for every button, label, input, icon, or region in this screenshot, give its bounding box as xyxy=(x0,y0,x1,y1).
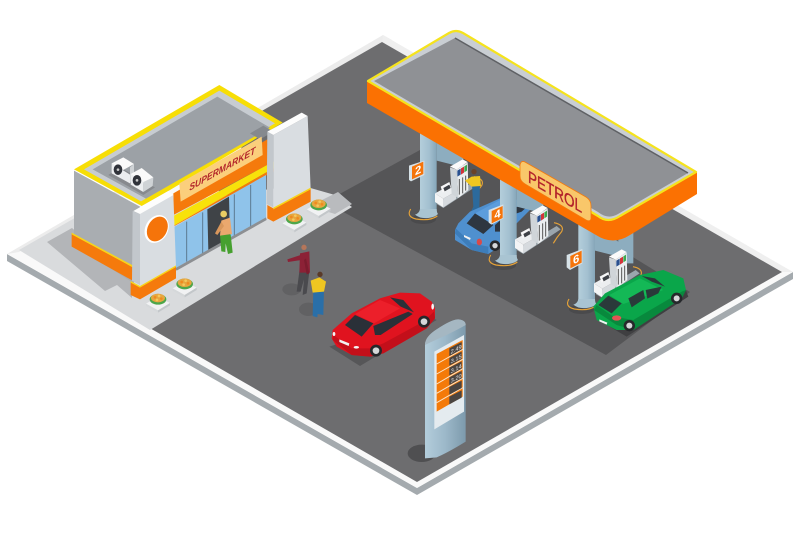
building left wall xyxy=(74,171,140,283)
canopy roof edge xyxy=(368,31,696,220)
price board: 2.49 xyxy=(451,344,462,356)
air conditioning units xyxy=(108,157,155,195)
price board xyxy=(437,340,463,412)
price board: 3.15 xyxy=(451,354,462,366)
price totem xyxy=(408,319,466,462)
supermarket building xyxy=(72,85,331,313)
yellow canopy strip xyxy=(173,162,273,226)
pump number sign 4 xyxy=(489,204,503,225)
roof xyxy=(74,85,283,206)
asphalt forecourt xyxy=(148,42,782,482)
canopy roof surface xyxy=(374,38,688,217)
supermarket sign: SUPERMARKET xyxy=(189,145,257,194)
red car xyxy=(329,293,437,366)
price board: 3.14 xyxy=(451,364,462,375)
totem body xyxy=(425,319,466,458)
pump number sign 2 xyxy=(409,161,424,181)
flower planters xyxy=(146,199,331,313)
totem shadow xyxy=(408,445,436,462)
pump number sign 2: 2 xyxy=(415,162,422,178)
left pier xyxy=(132,191,176,286)
left pier base xyxy=(131,265,176,299)
person in doorway xyxy=(215,211,233,254)
pump number sign 4: 4 xyxy=(494,206,501,222)
orange wall plinth xyxy=(72,233,133,281)
petrol sign: PETROL xyxy=(528,166,582,217)
blue car xyxy=(455,198,538,254)
person talking, maroon jacket xyxy=(282,245,310,295)
darker shaded asphalt under canopy xyxy=(325,139,690,355)
fuel island: pillar and pump 4 xyxy=(489,173,562,270)
green car xyxy=(593,270,688,337)
customer, yellow jacket xyxy=(299,272,326,317)
pump number sign 6 xyxy=(567,249,582,270)
shop fascia xyxy=(173,139,267,215)
fuel island: pillar and pump 6 xyxy=(568,217,641,314)
canopy fascia xyxy=(367,81,697,240)
price board: 3.20 xyxy=(451,373,462,385)
attendant refuelling xyxy=(465,169,481,213)
price panel xyxy=(434,335,464,429)
glass shopfront xyxy=(173,175,267,271)
pump number sign 6: 6 xyxy=(573,251,580,267)
petrol canopy xyxy=(367,31,697,240)
totem cap xyxy=(425,319,466,345)
orange circle logo xyxy=(140,211,174,247)
right pier xyxy=(267,113,311,222)
supermarket sidewalk xyxy=(19,185,352,330)
fuel island: pillar and pump 2 xyxy=(409,127,482,224)
